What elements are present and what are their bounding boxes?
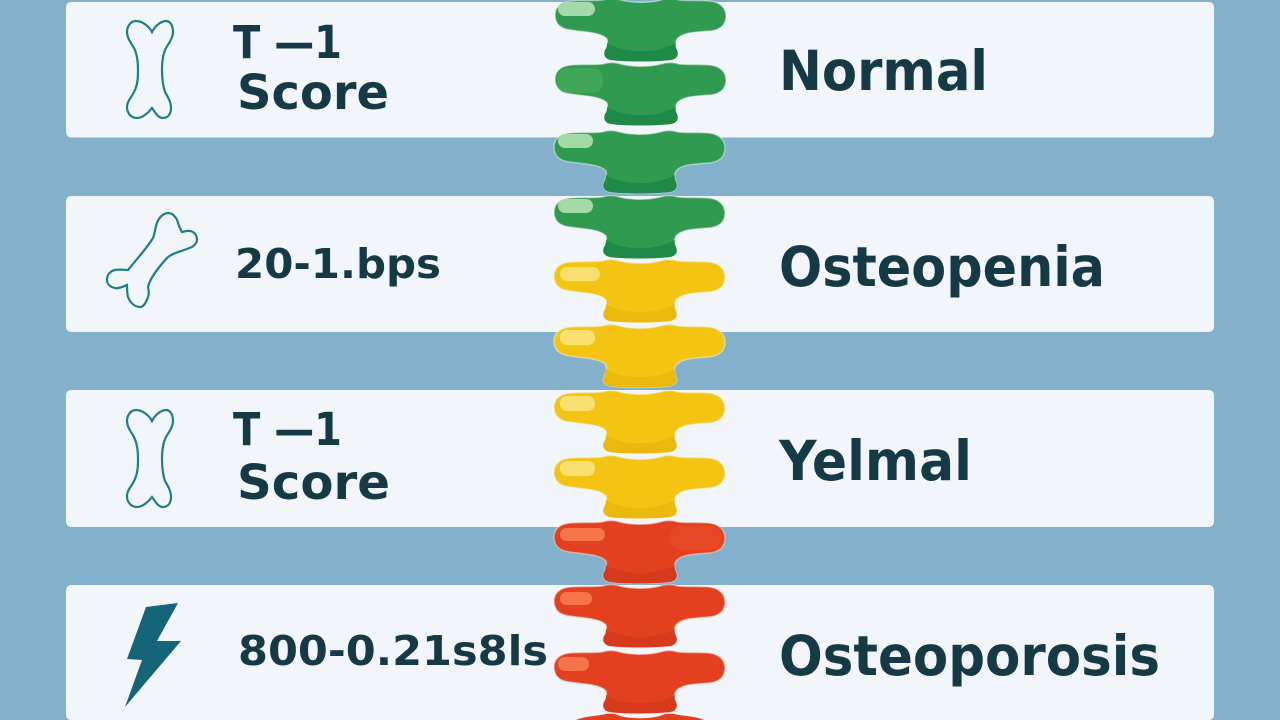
T-score label: T —1	[233, 16, 342, 69]
T-score label: Score	[237, 455, 390, 511]
vertebra green 1	[555, 0, 726, 62]
panel: row 1 Normal	[66, 2, 1214, 138]
card 3	[66, 390, 1214, 527]
card 2	[66, 196, 1214, 332]
vertebra yellow 4	[554, 456, 725, 518]
vertebra green 2	[555, 62, 726, 126]
T-score label	[233, 16, 389, 121]
icon: bone tilted	[107, 213, 197, 307]
vertebra green 3	[554, 130, 725, 194]
vertebra yellow 3	[554, 390, 725, 454]
card 1	[66, 2, 1214, 138]
vertebra yellow 1	[554, 260, 725, 322]
range value: 800-0.21s8ls	[238, 627, 548, 675]
category: Osteopenia: Osteopenia	[779, 235, 1105, 299]
vertebra red 1	[554, 520, 725, 584]
category: Normal: Normal	[779, 39, 988, 103]
spine: stacked vertebrae	[554, 0, 726, 720]
category: Yelmal: Yelmal	[778, 429, 972, 493]
vertebra red 2	[554, 584, 725, 648]
vertebra yellow 2	[554, 324, 725, 388]
icon: lightning bolt	[125, 603, 181, 707]
panel: row 3 Yelmal	[66, 390, 1214, 527]
vertebra red 4	[576, 714, 704, 720]
range value: 20-1.bps	[235, 240, 441, 288]
vertebra green 4	[554, 196, 725, 258]
panel: row 2 Osteopenia	[66, 196, 1214, 332]
icon: bone upright	[127, 410, 173, 507]
icon: bone upright	[127, 21, 173, 118]
card 4	[66, 585, 1214, 720]
vertebra red 3	[554, 650, 725, 714]
T-score label: T —1	[233, 403, 342, 456]
T-score label	[233, 403, 390, 511]
T-score label: Score	[237, 65, 389, 121]
panel: row 4 Osteoporosis	[66, 585, 1214, 720]
category: Osteoporosis: Osteoporosis	[779, 624, 1160, 688]
